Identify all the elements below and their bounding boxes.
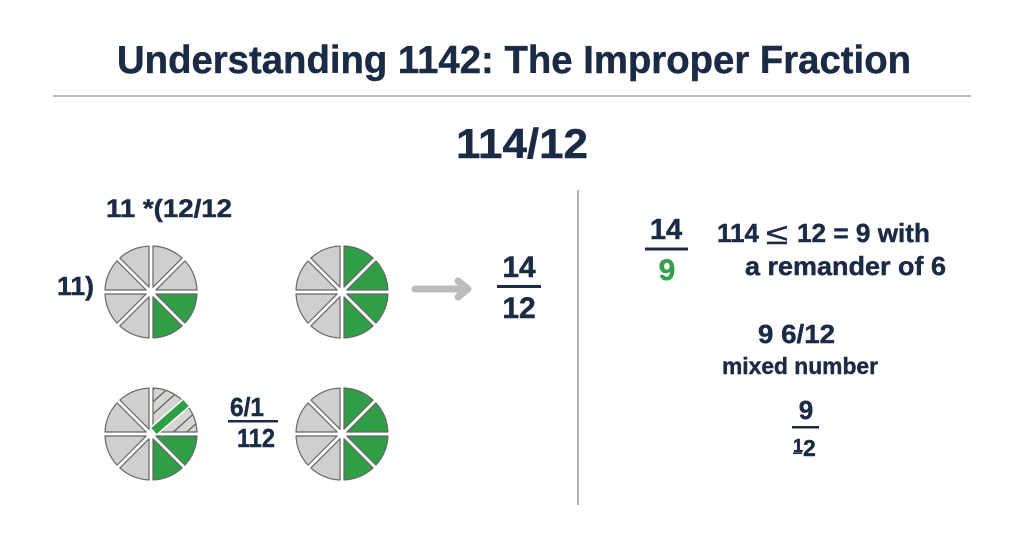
vertical divider xyxy=(577,190,579,505)
mixed number label: mixed number xyxy=(722,353,878,379)
division explanation: a remander of 6 xyxy=(745,251,946,281)
pie: two of eight green xyxy=(96,237,206,347)
fraction 6/1 over 112: 6/1 xyxy=(230,392,264,422)
main fraction heading: 114/12 xyxy=(456,120,588,167)
division explanation: 114 xyxy=(717,218,760,248)
title rule xyxy=(53,95,971,97)
division explanation xyxy=(717,218,946,281)
fraction 9 over 12 xyxy=(792,395,819,461)
pie: four of eight green, bottom row xyxy=(287,379,397,489)
fraction 14 over green 9: 9 xyxy=(659,254,675,287)
label: 11): 11) xyxy=(57,271,94,301)
fraction 14 over 12 xyxy=(497,251,541,325)
fraction 14 over 12: 12 xyxy=(502,292,536,325)
label: 11 times 12/12: 11 *(12/12 xyxy=(106,195,232,223)
fraction 14 over 12: 14 xyxy=(502,251,536,284)
fraction 9 over 12: 1 xyxy=(793,436,803,456)
fraction 14 over green 9: 14 xyxy=(650,214,682,246)
fraction 6/1 over 112 xyxy=(228,392,278,453)
division explanation: 12 = 9 with xyxy=(797,218,930,248)
pie: four of eight green, top row xyxy=(287,237,397,347)
mixed number value: 9 6/12 xyxy=(758,319,835,349)
arrow xyxy=(415,281,468,297)
fraction 6/1 over 112: 112 xyxy=(237,423,275,453)
division explanation: ≤ xyxy=(766,218,788,251)
fraction 14 over green 9 xyxy=(645,214,688,287)
title: Understanding 1142: The Improper Fraction xyxy=(117,39,911,82)
pie: hatched top-right with green stripe xyxy=(96,379,197,489)
fraction 9 over 12: 9 xyxy=(799,395,813,425)
fraction 9 over 12: 2 xyxy=(803,435,816,461)
